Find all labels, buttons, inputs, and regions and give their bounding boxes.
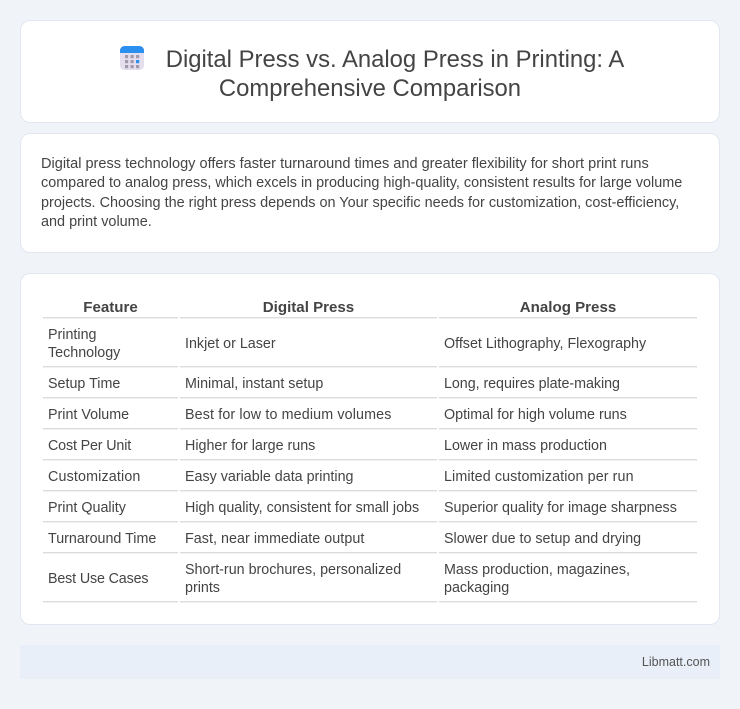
- row: turnaround time: Turnaround Time: [48, 531, 156, 547]
- comparison table: prints: [185, 580, 220, 596]
- row: printing technology: Printing: [48, 327, 96, 343]
- intro card: [20, 133, 720, 253]
- comparison table: Best for low to medium volumes: [185, 407, 392, 423]
- row: printing technology: Technology: [48, 345, 120, 361]
- comparison table: High quality, consistent for small jobs: [185, 500, 419, 516]
- row: print quality: Print Quality: [48, 500, 126, 516]
- row: customization: Customization: [48, 469, 141, 485]
- header: analog press: Analog Press: [520, 299, 616, 316]
- row: setup time: Setup Time: [48, 376, 120, 392]
- intro text: Digital press technology offers faster turnaround times and greater flexibility for short print runs: [41, 156, 649, 172]
- comparison table: Optimal for high volume runs: [444, 407, 627, 423]
- comparison table: Fast, near immediate output: [185, 531, 364, 547]
- row: print volume: Print Volume: [48, 407, 129, 423]
- header: digital press: Digital Press: [263, 299, 354, 316]
- comparison table: Minimal, instant setup: [185, 376, 323, 392]
- comparison table: Short-run brochures, personalized: [185, 562, 401, 578]
- comparison table: Superior quality for image sharpness: [444, 500, 677, 516]
- comparison table: Inkjet or Laser: [185, 336, 276, 352]
- intro text: and print volume.: [41, 214, 152, 230]
- comparison table: Long, requires plate-making: [444, 376, 620, 392]
- row: printing technology: [48, 327, 120, 361]
- row: best use cases: Best Use Cases: [48, 571, 148, 587]
- title: ​Digital Press vs. Analog Press in Printing: A: [166, 46, 624, 73]
- comparison table: Slower due to setup and drying: [444, 531, 641, 547]
- intro text: projects. Choosing the right press depends on Your specific needs for customization, cost-efficiency,: [41, 194, 679, 210]
- comparison table: Easy variable data printing: [185, 469, 353, 485]
- icon: calendar: [120, 46, 144, 70]
- row: cost per unit: Cost Per Unit: [48, 438, 131, 454]
- table card: [20, 273, 720, 625]
- footer credit: Libmatt.com: [642, 655, 710, 669]
- comparison table: Offset Lithography, Flexography: [444, 336, 646, 352]
- title: Comprehensive Comparison: [219, 75, 521, 102]
- title: [166, 46, 624, 102]
- intro text: compared to analog press, which excels in producing high-quality, consistent results for large volume: [41, 175, 682, 191]
- comparison table: Higher for large runs: [185, 438, 315, 454]
- header: feature: Feature: [83, 299, 138, 316]
- footer: [20, 645, 720, 679]
- title card: [20, 20, 720, 123]
- comparison table: Lower in mass production: [444, 438, 607, 454]
- comparison table: Limited customization per run: [444, 469, 634, 485]
- intro text: [41, 156, 682, 230]
- comparison table: Mass production, magazines,: [444, 562, 630, 578]
- comparison table: packaging: [444, 580, 509, 596]
